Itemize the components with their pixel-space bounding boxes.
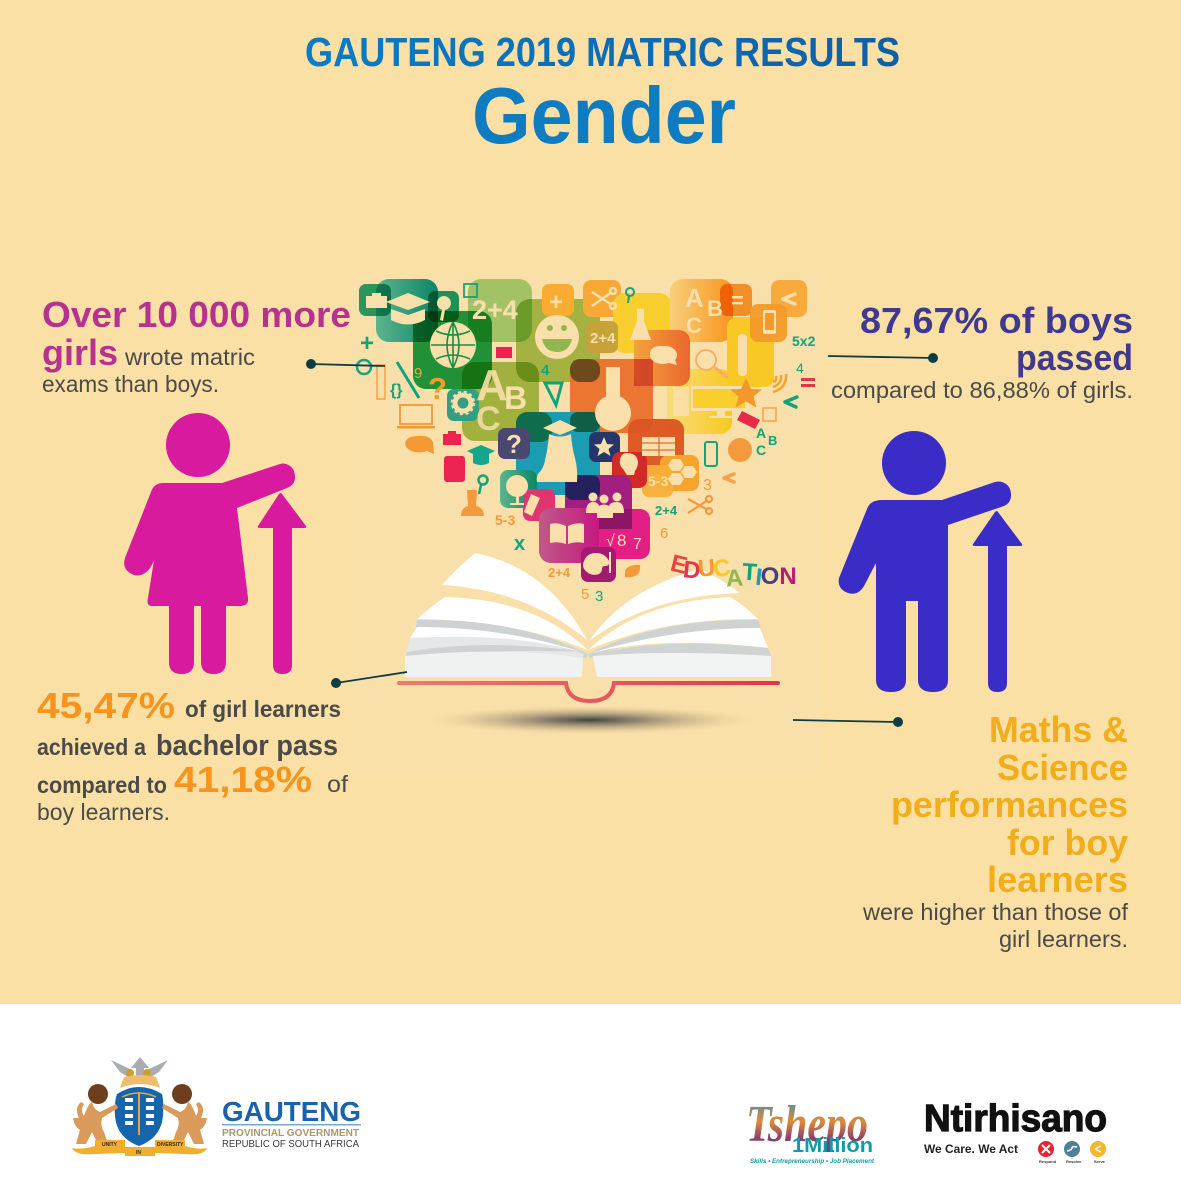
- text glyphs on tiles: A: [685, 283, 704, 313]
- glyph: 5 3: 5: [581, 586, 589, 603]
- glyph: 5x2: 5x2: [792, 333, 816, 349]
- callout: bachelor pass: boy learners.: [37, 799, 170, 825]
- title: [305, 29, 900, 160]
- text glyphs on tiles: +: [549, 289, 563, 316]
- cream icons on tiles: [366, 283, 795, 575]
- callout: maths and science: Maths &: [989, 709, 1128, 750]
- icon: lightbulb: [620, 453, 638, 475]
- icon: leaf bubble: [625, 565, 640, 577]
- motto text: [102, 1142, 184, 1156]
- EDUCATION lettering: T: [741, 559, 758, 587]
- small loose icons: [357, 284, 816, 605]
- callout: bachelor pass: of: [327, 771, 349, 797]
- icon: orange person: [461, 490, 484, 516]
- callout: maths and science: performances: [891, 784, 1128, 825]
- icon: question mark: ?: [428, 371, 447, 406]
- icon: boy figure: [839, 431, 1011, 692]
- illustration panel background: [352, 275, 820, 770]
- open book: [399, 553, 778, 735]
- icon: briefcase: [366, 293, 387, 308]
- EDUCATION lettering: C: [711, 554, 732, 583]
- icon: orange scissors: [688, 496, 712, 514]
- icon: red beaker: [444, 456, 465, 482]
- icon: magnifier: [437, 296, 451, 321]
- footer band: [0, 1004, 1181, 1181]
- icon: people group: [586, 492, 624, 518]
- logo: Ntirhisano: Serve: [1094, 1159, 1106, 1164]
- glyph: braces: {}: [390, 382, 402, 399]
- callout: more girls wrote matric: exams than boys.: [42, 371, 219, 397]
- EDUCATION lettering: D: [682, 556, 702, 585]
- book pages: [442, 553, 587, 640]
- callout: maths and science: Science: [997, 747, 1128, 788]
- EDUCATION lettering: E: [668, 550, 690, 580]
- glyph: 5-3: 5-3: [495, 512, 515, 528]
- central education illustration: [352, 275, 820, 770]
- logo: Ntirhisano: Respond: [1039, 1159, 1057, 1164]
- icon: red briefcase: [443, 431, 461, 445]
- EDUCATION lettering: N: [779, 563, 797, 590]
- icon: orange speech bubble: [405, 436, 434, 454]
- colourful icon tiles: [359, 279, 807, 582]
- icon: orange checkbox: [763, 408, 776, 421]
- motto text: DIVERSITY: [157, 1142, 184, 1148]
- icon: envelope: [737, 411, 760, 429]
- crest shield: [115, 1087, 163, 1146]
- logo: Gauteng coat of arms: [72, 1057, 207, 1156]
- logo: Gauteng Provincial Government wordmark: PROVINCIAL GOVERNMENT: [222, 1127, 360, 1139]
- icon: checkbox: [464, 284, 477, 297]
- icon: teal share: [785, 397, 797, 407]
- icon: share on tile: [783, 294, 795, 304]
- logo: Tshepo 1Million: Tshepo: [746, 1096, 868, 1153]
- arrow: boy up: [973, 511, 1022, 692]
- icon: plus and protractor: [357, 330, 374, 374]
- icon: teal phone: [705, 442, 717, 466]
- title line: Gauteng 2019 Matric Results: GAUTENG 2019 MATRIC RESULTS: [305, 29, 900, 75]
- callout: maths and science: for boy: [1007, 822, 1128, 863]
- left lion: [73, 1084, 118, 1144]
- callout: more girls wrote matric: [42, 294, 351, 397]
- EDUCATION lettering: [668, 550, 797, 593]
- callout: maths and science: were higher than those of: [862, 899, 1129, 925]
- crest spears: [111, 1057, 168, 1078]
- icon: gear: [452, 392, 474, 414]
- callout: bachelor pass: bachelor pass: [156, 730, 338, 762]
- callout: more girls wrote matric: girls: [42, 332, 118, 373]
- icon: teal magnifier: [478, 476, 488, 494]
- icon: scissors on tile: [592, 288, 616, 309]
- icon: hexagons: [668, 459, 697, 485]
- text glyphs on tiles: B: [707, 296, 723, 321]
- callout: bachelor pass: compared to: [37, 772, 167, 798]
- logo: Ntirhisano: We Care. We Act: [924, 1142, 1018, 1156]
- text glyphs on tiles: B: [504, 380, 527, 416]
- text glyphs on tiles: 2+4: [590, 330, 616, 347]
- book shadow: [420, 705, 760, 735]
- connector: maths callout: [793, 717, 903, 727]
- title line: Gender: Gender: [472, 71, 736, 160]
- icon: globe: [430, 322, 476, 368]
- text glyphs on tiles: =: [731, 288, 744, 313]
- EDUCATION lettering: O: [761, 563, 779, 590]
- icon: plus and protractor: +: [360, 330, 374, 357]
- glyph: teal 4: 4: [541, 362, 550, 379]
- glyph: 3: 3: [703, 477, 712, 494]
- icon: orange share: [724, 474, 734, 482]
- icon: smiley: [535, 315, 579, 359]
- text glyphs on tiles: 2+4: [472, 295, 518, 325]
- glyph: 5 3: 3: [595, 588, 603, 605]
- logo: Gauteng Provincial Government wordmark: GAUTENG: [222, 1096, 361, 1127]
- icon: teal triangle: [545, 383, 562, 405]
- callout: maths and science: [862, 709, 1129, 952]
- text glyphs on tiles: [472, 283, 744, 553]
- icon: graduate silhouette: [537, 420, 577, 482]
- connector: boys callout: [828, 353, 938, 363]
- glyph: 2+4 teal: 2+4: [655, 503, 678, 518]
- book cover line: [399, 683, 778, 701]
- book page block: [405, 651, 583, 677]
- glyph: A B C: C: [756, 442, 766, 458]
- text glyphs on tiles: √: [606, 533, 615, 550]
- EDUCATION lettering: U: [697, 554, 716, 583]
- logo: Ntirhisano: Resolve: [1066, 1159, 1082, 1164]
- icon: round-bottom flask: [595, 367, 631, 431]
- icon: teal magnifier 2: [626, 288, 634, 303]
- icon: monitor: [673, 386, 747, 418]
- icon: wifi arcs: [773, 374, 786, 392]
- icon: orange globe: [728, 438, 752, 462]
- logo: Gauteng Provincial Government wordmark: REPUBLIC OF SOUTH AFRICA: [222, 1138, 359, 1150]
- icon: star: [594, 437, 614, 456]
- icon: laptop: [397, 405, 435, 428]
- icon: notebook: [524, 494, 540, 516]
- icon: phone: [763, 310, 776, 334]
- icon: table: [642, 437, 675, 456]
- icon: palette: [583, 553, 609, 575]
- motto text: IN: [136, 1150, 141, 1156]
- text glyphs on tiles: C: [476, 400, 501, 438]
- crest crown balls: [126, 1069, 151, 1077]
- icon: graduation cap: [386, 293, 430, 324]
- icon: orange star: [730, 378, 762, 408]
- text glyphs on tiles: C: [686, 313, 702, 338]
- arrow: girl up: [258, 493, 306, 674]
- glyph: 6: 6: [660, 525, 668, 542]
- glyph: A B C: B: [768, 433, 777, 448]
- shield pick and bars: [122, 1092, 156, 1135]
- icon: teal cap: [467, 445, 495, 465]
- icon: speech bubble: [650, 346, 677, 365]
- callout: bachelor pass: of girl learners: [185, 696, 341, 722]
- callout: more girls wrote matric: Over 10 000 more: [42, 294, 351, 335]
- icon: girl figure: [124, 413, 295, 674]
- icon: pencil: [397, 362, 419, 398]
- glyph: equals: [801, 378, 815, 387]
- glyph: A B C: A: [756, 425, 766, 441]
- glyph: 4: 4: [796, 360, 804, 376]
- callout: boys passed: [831, 300, 1133, 403]
- icon: paintbrush: [609, 552, 611, 573]
- glyph: A B C: [756, 425, 777, 458]
- callout: bachelor pass: [37, 685, 349, 825]
- icon: ruler: [377, 365, 385, 399]
- glyph: nine: 9: [414, 365, 422, 382]
- text glyphs on tiles: A: [476, 361, 508, 410]
- text glyphs on tiles: ?: [506, 429, 522, 459]
- callout: bachelor pass: achieved a: [37, 734, 146, 760]
- callout: boys passed: 87,67% of boys: [860, 300, 1133, 341]
- icon: open book: [550, 523, 584, 544]
- logo: Tshepo 1Million: 1Million: [792, 1135, 873, 1157]
- glyph: 5 3: [581, 586, 603, 605]
- callout: bachelor pass: 41,18%: [174, 759, 312, 800]
- crest crown: [120, 1075, 160, 1088]
- icon: orange magnifier: [696, 350, 728, 378]
- EDUCATION lettering: I: [754, 564, 764, 591]
- right lion: [162, 1084, 207, 1144]
- callout: bachelor pass: 45,47%: [37, 685, 175, 726]
- motto text: UNITY: [102, 1142, 118, 1148]
- icon: red binder clip: [496, 347, 512, 358]
- icon: desk globe: [506, 475, 528, 505]
- text glyphs on tiles: 5-3: [648, 473, 668, 489]
- text glyphs on tiles: 8: [617, 531, 626, 550]
- callout: maths and science: girl learners.: [999, 926, 1128, 952]
- connector: girls callout: [306, 359, 385, 369]
- callout: more girls wrote matric: wrote matric: [124, 344, 255, 370]
- logo: Ntirhisano: Ntirhisano: [924, 1098, 1107, 1140]
- connector: bachelor callout: [331, 672, 407, 688]
- icon: test tube: [738, 334, 747, 376]
- callout: boys passed: compared to 86,88% of girls.: [831, 377, 1133, 403]
- logo: Ntirhisano: [924, 1098, 1107, 1164]
- EDUCATION lettering: A: [725, 564, 744, 593]
- logo: Tshepo 1Million: Skills • Entrepreneurship • Job Placement: [750, 1158, 875, 1165]
- glyph: x: x: [514, 533, 525, 555]
- logo: Gauteng Provincial Government wordmark: [222, 1096, 361, 1150]
- callout: maths and science: learners: [987, 859, 1128, 900]
- icon: conical flask: [630, 309, 651, 340]
- glyph: 2+4 orange: 2+4: [548, 565, 571, 580]
- callout: boys passed: passed: [1016, 337, 1133, 378]
- text glyphs on tiles: 7: [633, 536, 642, 553]
- motto ribbon: [72, 1140, 207, 1156]
